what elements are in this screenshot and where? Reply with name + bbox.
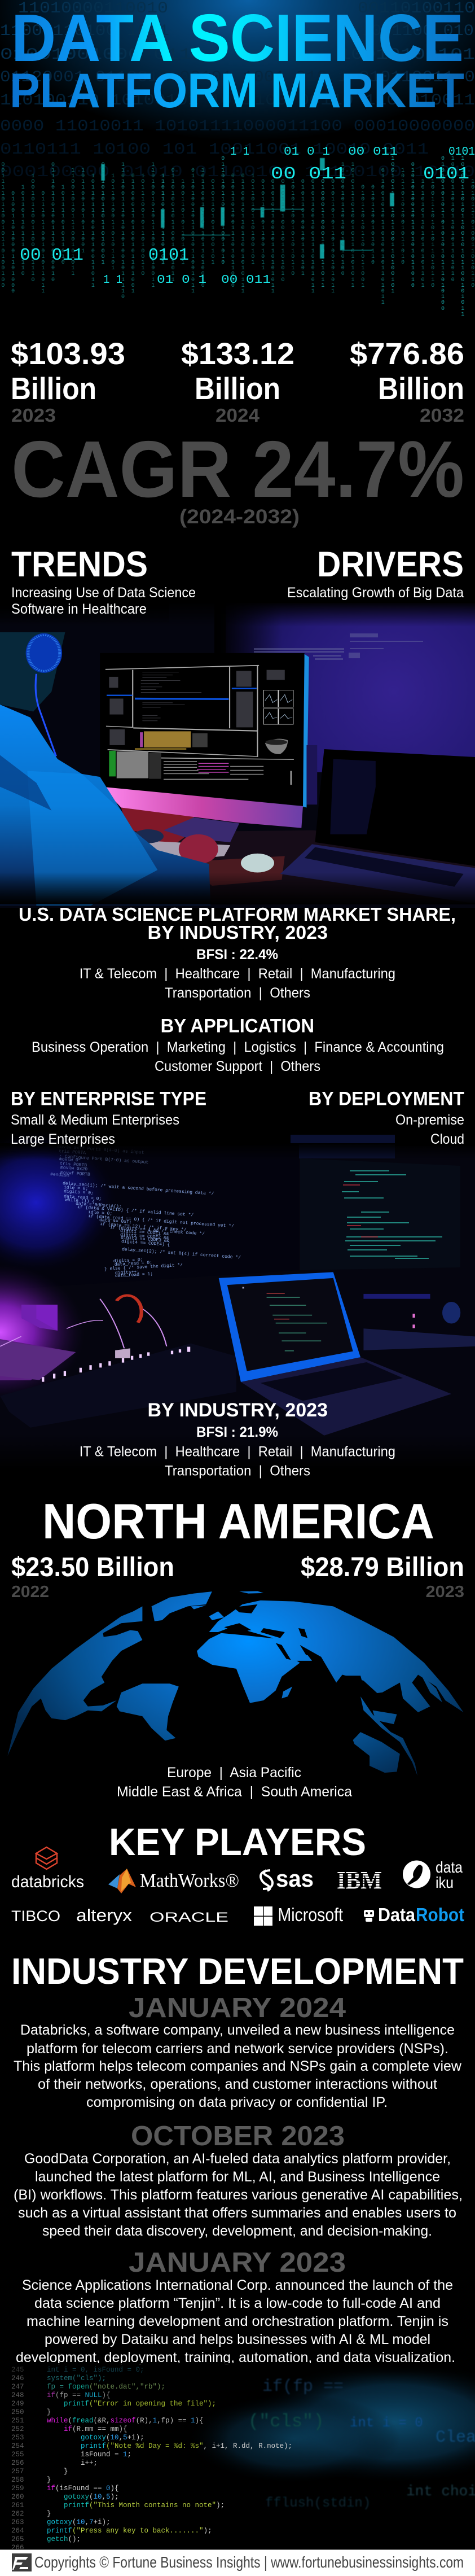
by enterprise type [11,1088,206,1147]
logo: Oracle: ORACLE [149,1910,228,1925]
stat 2032: $776.86 [350,337,464,371]
left monitor code: digits++; [115,1270,139,1276]
by industry global: Transportation | Others [165,1463,310,1479]
binary rain matrix: 001101011011010001 [102,161,105,266]
code listing: 266 [11,2544,24,2552]
logo: SAS [261,1865,314,1892]
left monitor code: if (data & VALID) { /* if valid line set */ [77,1205,194,1218]
logo: Dataiku: iku [436,1874,454,1891]
logo: DataRobot: Robot [416,1904,464,1925]
stat 2024: $133.12 [181,337,294,371]
logo: Microsoft: Microsoft [278,1904,343,1925]
by deployment: BY DEPLOYMENT [309,1088,464,1110]
left monitor code: digit1 == CODE1 && [120,1228,169,1237]
development: October 2023 [14,2121,463,2239]
binary rain matrix: 100110101101001 [181,179,184,266]
faint binary background rows [0,0,475,181]
left monitor code: ; Configure Port B(7-0) as output [59,1154,148,1165]
development: January 2024: platform for telecom carriers and network service providers (NSPs). [27,2041,448,2057]
by application: Business Operation | Marketing | Logistics | Finance & Accounting [32,1039,444,1055]
left monitor code: #endasm [50,1172,69,1178]
code listing: 255 [11,2451,24,2459]
development: January 2023: machine learning development and orchestration platform. Tenjin is [27,2313,448,2329]
development: January 2023: JANUARY 2023 [129,2247,346,2278]
binary rain matrix: 101110010110100110 [141,173,144,277]
left monitor code: movlw 0xff Ports B(4-0) as input [58,1144,144,1156]
photo: analyst at monitor [0,602,475,908]
industry segments U.S.: IT & Telecom | Healthcare | Retail | Manufacturing [80,966,395,982]
development: October 2023: such as a virtual assistant that offers summaries and enables users to [18,2205,456,2221]
trends: Increasing Use of Data Science [11,585,196,601]
binary rain matrix: 101100101011011010010 [201,168,205,289]
industry segments U.S.: BFSI : 22.4% [196,947,278,963]
code listing: if(R.mm == mm){ [64,2425,127,2433]
code listing: 252 [11,2425,24,2433]
faint binary background rows: 00110100110 [358,0,475,18]
CAGR: (2024-2032) [179,506,300,528]
left monitor code: data &= 0xf; [99,1218,132,1225]
left monitor code: data = RdPortA(); [76,1201,122,1210]
code listing: 265 [11,2535,24,2543]
binary rain matrix: 0110100101101011001011 [191,168,195,295]
development: October 2023: launched the latest platform for ML, AI, and Business Intelligence [35,2169,440,2185]
binary rain matrix: 010110100101101010 [281,179,285,283]
binary rain matrix: 1100101011100101011 [71,168,74,277]
blurred code in the distance [248,2377,475,2511]
bright binary digits [20,146,475,287]
logo: SAS: sas [276,1865,314,1892]
left monitor code: delay_sec(2); /* set B(4) if correct code */ [122,1247,241,1261]
left monitor code: movlw 0 [59,1157,78,1163]
stat 2023 [11,337,125,426]
faint binary background rows: 000100000 01010 01100101 11100100 10010 [0,164,475,181]
blurred code in the distance: int i = 0 [350,2416,423,2431]
faint binary background rows: 11010000110010 [18,0,168,18]
binary rain matrix: 01011010110100101011 [331,179,335,295]
market size stats [11,337,464,426]
binary rain matrix: 011101100101011011 [41,191,45,295]
code listing: fp = fopen("note.dat","rb"); [47,2383,165,2391]
code listing: } [47,2408,51,2416]
left monitor code: movlw 0x20 [60,1165,88,1172]
blurred code in the distance: if(fp == [262,2377,344,2396]
binary rain matrix: 0101101011001011 [261,179,265,272]
logo: Dataiku: data [436,1858,463,1876]
binary rain matrix: 101100101011001 [81,168,85,255]
bright binary digits: 00 011 [348,146,398,159]
development: January 2024: This platform helps telecom companies and NSPs gain a complete view [14,2058,462,2074]
binary rain matrix: 01010110010110101011 [271,179,275,295]
by application: BY APPLICATION [161,1015,314,1036]
binary rain matrix: 10111101011010 [61,185,65,266]
binary rain matrix: 0011110110010110100100 [1,161,5,289]
bright binary digits: 01 0 1 [157,274,206,287]
binary rain matrix: 01011010011101011010 [231,173,235,289]
code listing: 253 [11,2434,24,2442]
development: January 2024: compromising on data privacy or confidential IP. [86,2094,388,2110]
logo: DataRobot: Data [378,1904,416,1925]
bright binary digits: 00 011 [20,246,83,265]
binary rain matrix [0,0,475,339]
left monitor code: data_read = 0; [115,1260,152,1267]
binary rain matrix: 1010111010011010110 [471,179,474,289]
code listing: } [47,2510,51,2518]
binary rain matrix: 1101001010111000110011 [151,161,155,289]
development: October 2023: (BI) workflows. This platform features various generative AI capabilities, [14,2187,463,2203]
development: January 2023: powered by Dataiku and helps businesses with AI & ML model [45,2332,430,2347]
bright binary digits: 01 0 1 [284,146,330,159]
bright binary digits: 00 011 [221,274,271,287]
binary rain matrix: 100101110101100110100101 [391,156,394,295]
other regions: Middle East & Africa | South America [117,1784,352,1800]
other regions: Europe | Asia Pacific [167,1765,301,1781]
left monitor code: } else { /* save the digit */ [104,1263,183,1272]
binary rain matrix: 1010101101010101101 [421,179,425,289]
stat 2024: 2024 [215,405,260,426]
binary rain matrix: 10100101101001010100 [341,161,345,277]
left monitor code: idle = 0; [88,1210,113,1217]
left monitor code: tris PORTB [60,1161,87,1168]
stat 2032: Billion [378,371,464,406]
trends [11,545,196,617]
code listing: 259 [11,2485,24,2492]
binary rain matrix: 10110100110101101 [111,173,115,272]
left monitor code: if (data == 12) { /* if # key */ [100,1222,187,1233]
by application: Customer Support | Others [155,1059,320,1074]
light streaks in binary rain [101,158,394,259]
code listing: printf("Press any key to back......."); [47,2527,212,2535]
left monitor code: if (data_read == 0) { /* if digit not processed yet */ [88,1214,234,1229]
code listing: 254 [11,2442,24,2450]
by industry global: IT & Telecom | Healthcare | Retail | Manufacturing [80,1444,395,1460]
binary rain matrix: 1001011001100011110 [32,173,35,283]
left monitor code: data_read = 0; [64,1194,102,1202]
code listing: 260 [11,2493,24,2501]
by deployment: On-premise [395,1112,464,1128]
code listing [11,2366,292,2552]
by enterprise type: BY ENTERPRISE TYPE [11,1088,206,1110]
code listing: printf("This Month contains no note"); [64,2501,225,2509]
stat 2023: $103.93 [11,337,125,371]
title [10,1,464,118]
binary rain matrix: 011101101001110010010 [51,161,55,283]
code listing: printf("Note %d Day = %d: %s", i+1, R.dd, R.note); [81,2442,292,2450]
by deployment [309,1088,464,1147]
stat 2024 [181,337,294,426]
binary rain matrix: 110100111010101001011110 [121,161,125,300]
logo: MathWorks [108,1869,239,1893]
logo: databricks [11,1847,84,1891]
drivers: Escalating Growth of Big Data [287,585,464,601]
binary rain matrix: 10110101001011010 [401,168,404,266]
code listing: } [47,2476,51,2484]
code listing: gotoxy(10,7+i); [47,2518,111,2526]
binary rain matrix: 10101100101010110 [291,179,294,277]
code listing: 250 [11,2408,24,2416]
by enterprise type: Large Enterprises [11,1131,115,1147]
key players heading: KEY PLAYERS [109,1821,366,1864]
development: January 2023: Science Applications International Corp. announced the launch of the [22,2277,453,2293]
regional values [11,1552,464,1601]
logos: key players [11,1847,464,1926]
left monitor code: while (1) { [65,1197,95,1205]
U.S. market share heading: BY INDUSTRY, 2023 [148,922,328,943]
development: October 2023: speed their data discovery, development, and decision-making. [42,2223,432,2239]
code listing: gotoxy(10,5+i); [81,2434,144,2442]
logo: IBM: IBM [337,1866,382,1894]
faint binary background rows: 01001001000 011 [0,46,192,64]
faint binary background rows: 110100110 10100101 1011100 00110 110 010011 [0,92,475,110]
bright binary digits: 0101 [423,164,469,184]
development: January 2024: Databricks, a software company, unveiled a new business intelligence [20,2022,455,2038]
faint binary background rows: 10010100101 [338,46,475,64]
binary rain matrix: 1010011010110010101100101011 [461,156,464,318]
development: January 2024: JANUARY 2024 [129,1993,346,2023]
code listing: if(fp == NULL){ [47,2391,111,2399]
binary rain matrix: 010101010110101010111010100 [441,156,445,312]
logo: DataRobot [364,1904,464,1925]
logo: Microsoft [254,1904,343,1926]
stat 2023: 2023 [11,405,56,426]
U.S. market share heading: U.S. DATA SCIENCE PLATFORM MARKET SHARE, [19,904,456,925]
binary rain matrix: 0100011000110111011 [321,179,324,289]
stat 2024: Billion [195,371,280,406]
binary rain matrix: 01011001001110101011 [311,179,315,295]
industry development heading: INDUSTRY DEVELOPMENT [11,1950,464,1992]
faint binary background rows: 01120001 0110010 00101 1001 010 1 010110011 0 [0,69,475,86]
logo: MathWorks: MathWorks® [140,1870,239,1891]
regional values: $23.50 Billion [11,1552,174,1582]
regional values: 2023 [425,1583,464,1601]
code listing: isFound = 1; [81,2451,131,2459]
binary rain matrix: 010110101100101 [211,179,215,266]
globe [7,1591,464,1775]
code listing: system("cls"); [47,2374,106,2382]
binary rain matrix: 01011010010110101 [301,179,305,277]
by industry global: BY INDUSTRY, 2023 [148,1399,328,1421]
faint binary background rows: 0110111 10100 101 10011001 10010 0011 [0,141,429,159]
development: October 2023: GoodData Corporation, an AI-fueled data analytics platform provider, [24,2151,451,2167]
left monitor code: tris PORTA [59,1149,86,1156]
code listing: 256 [11,2459,24,2467]
stat 2032: 2032 [420,405,464,426]
blurred code in the distance: ("cls") [248,2411,324,2432]
regional values: 2022 [11,1583,49,1601]
binary rain matrix: 010110101101011001 [361,185,364,289]
code listing: 246 [11,2374,24,2382]
binary rain matrix: 10110111001010011011 [91,173,95,289]
binary rain matrix: 0101010010110101011010 [411,161,415,289]
background: blue glow behind title [0,0,475,181]
code listing: i++; [81,2459,98,2467]
code listing: 247 [11,2383,24,2391]
binary rain matrix: 1011010110100101 [251,173,254,266]
industry segments U.S.: Transportation | Others [165,985,310,1001]
north america heading: NORTH AMERICA [42,1493,434,1549]
left monitor code: delay_sec(1); /* wait a second before processing data */ [63,1181,214,1197]
by industry global [80,1399,395,1479]
U.S. market share heading [19,904,456,943]
development: January 2024: of their networks, operations, and customer interactions without [38,2076,437,2092]
bright binary digits: 1 1 [230,146,249,159]
left monitor code: if (digits == 4 && /* check code */ [110,1225,205,1237]
binary rain matrix: 1010111010010110101011 [351,161,355,289]
code listing: 262 [11,2510,24,2518]
left monitor code: movwf PORTB [60,1170,90,1178]
drivers [287,545,464,601]
bright binary digits: 0101 [148,246,189,265]
photo: code monitors and laptop [0,1129,475,1469]
left monitor code: digit2 == CODE2 && [120,1232,169,1241]
development: January 2023 [16,2247,455,2365]
code listing: printf("Error in opening the file"); [64,2400,216,2408]
code listing: } [64,2468,68,2476]
stat 2023: Billion [11,371,96,406]
code listing: 251 [11,2417,24,2425]
bright binary digits: 00 011 [271,164,346,184]
left monitor code: digit4 == CODE4) { [121,1239,170,1248]
code listing: 258 [11,2476,24,2484]
binary rain matrix: 011001011011001010111 [241,173,245,295]
code listing: 263 [11,2518,24,2526]
code listing: if(isFound == 0){ [47,2485,119,2492]
stat 2032 [350,337,464,426]
code listing: 261 [11,2501,24,2509]
code listing: while(fread(&R,sizeof(R),1,fp) == 1){ [47,2417,204,2425]
left monitor code: digits = 0; [113,1257,143,1264]
logo: databricks: databricks [11,1873,84,1891]
logo: TIBCO: TIBCO [11,1908,60,1925]
logo: alteryx: alteryx [76,1905,133,1925]
left monitor code: data_read = 1; [115,1271,153,1279]
binary rain matrix: 1101100101110101 [161,173,165,266]
code listing: getch(); [47,2535,81,2543]
faint binary background rows: 1100 110100 1011 [0,23,169,40]
other regions [117,1765,352,1800]
binary rain matrix: 01101001011001101011 [171,168,175,283]
left monitor code: idle = 0; [64,1185,89,1192]
drivers: DRIVERS [317,545,464,584]
by deployment: Cloud [430,1131,464,1147]
binary rain matrix: 01011001010110 [371,185,375,266]
binary rain matrix: 1011011011101110 [21,185,25,277]
by application [32,1015,444,1074]
binary rain matrix: 010011010001101000 [11,191,15,295]
trends: TRENDS [11,545,148,584]
development: October 2023: OCTOBER 2023 [131,2121,345,2151]
faint binary background rows: 1001100 010 [361,23,474,40]
development: January 2023: data science platform “Tenjin”. It is a low-code to full-code AI and [34,2295,441,2311]
by industry global: BFSI : 21.9% [196,1424,278,1440]
binary rain matrix: 1001110101011010110 [431,179,434,289]
code listing: 248 [11,2391,24,2399]
left monitor code: digits = 0; [64,1189,94,1196]
binary rain matrix: 0110101100101001010 [221,156,225,266]
development: January 2023: development, deployment, training, automation, and data visualization. [16,2350,455,2365]
left monitor code [50,1144,241,1279]
trends: Software in Healthcare [11,601,147,617]
by enterprise type: Small & Medium Enterprises [11,1112,179,1128]
code listing: 245 [11,2366,24,2374]
logo: Dataiku [403,1858,463,1891]
photo: code editor background [0,2360,475,2552]
left monitor code: digit3 == CODE3 && [121,1235,170,1244]
industry segments U.S. [80,947,395,1001]
binary rain matrix: 1001011010110101101010 [451,156,455,283]
development: January 2024 [14,1993,462,2110]
bright binary digits: 1 1 [103,274,122,287]
code listing: gotoxy(10,5); [64,2493,119,2501]
code listing: int i = 0, isFound = 0; [47,2366,144,2374]
binary rain matrix: 011000110100101101001 [131,173,135,295]
faint binary background rows: 0000 11010011 10101111000011100 00010000000 [0,118,475,135]
footer [0,2549,475,2576]
code listing: 257 [11,2468,24,2476]
binary rain matrix: 011001010110100101101011 [381,168,385,306]
regional values: $28.79 Billion [301,1552,464,1582]
code listing: 264 [11,2527,24,2535]
blurred code in the distance: fflush(stdin) [265,2496,371,2511]
icon: Fortune Business Insights logo [12,2553,32,2571]
code listing: 249 [11,2400,24,2408]
